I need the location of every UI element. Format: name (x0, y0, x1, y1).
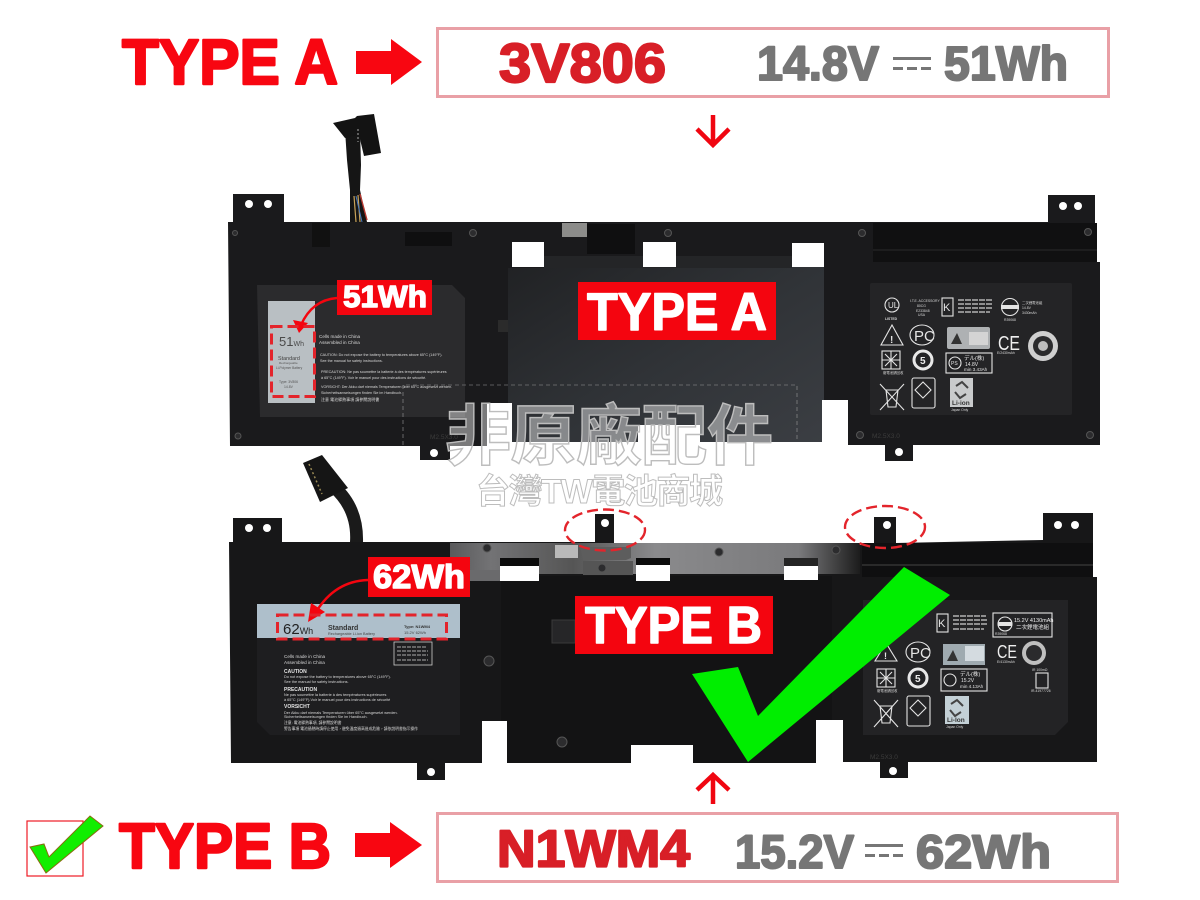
left label panel: 注意 電池驟熱事項 請參閱說明書 (321, 396, 379, 402)
dashed highlight: 51Wh label (272, 326, 314, 396)
left label panel: Sicherheitsanweisungen finden Sie im Handbuch. (321, 391, 402, 395)
left label panel: Assembled in China (284, 660, 325, 665)
windows (512, 242, 824, 267)
left label panel: See the manual for safety instructions. (284, 680, 349, 684)
left label panel: Rechargeable Li-ion Battery (328, 632, 375, 636)
spec box: TYPE B: N1WM4 (497, 820, 690, 878)
right regulatory panel: Japan Only (951, 408, 968, 412)
right regulatory panel (870, 283, 1072, 415)
battery photo: TYPE A: M2.5X3.0 (872, 433, 900, 440)
right regulatory panel: K (943, 302, 951, 314)
left label panel: 51Wh (279, 334, 304, 349)
mounting holes (245, 200, 1082, 457)
dashed highlight: 62Wh label (278, 615, 446, 639)
cable and connector (333, 114, 381, 222)
watermark (445, 399, 773, 511)
right regulatory panel: 二次鋰電池組 (1022, 300, 1043, 305)
dashed ellipse: center tab (565, 510, 645, 550)
spec box: TYPE A (438, 28, 1108, 96)
left label panel: Li-Polymer Battery (276, 366, 303, 370)
spec box: TYPE B: 62Wh (916, 825, 1051, 878)
right regulatory panel: UL (888, 301, 899, 310)
cable and connector (303, 455, 363, 542)
badge: TYPE B: TYPE B (585, 597, 762, 655)
right regulatory panel: 80CG (917, 304, 926, 308)
battery photo: TYPE B (229, 455, 1097, 780)
callout arrow: 51Wh (293, 298, 337, 333)
arrow: up to battery B (697, 775, 729, 804)
left label panel: PRECAUTION (284, 687, 317, 693)
left label panel: CAUTION (284, 669, 307, 675)
left label panel: Cells made in China (284, 654, 326, 659)
spec box: TYPE A: 3V806 (499, 32, 666, 94)
mounting holes (245, 519, 1079, 776)
right regulatory panel: ! (884, 651, 887, 661)
right regulatory panel: PC (910, 645, 931, 662)
left label panel: Type: N1WM4 (404, 624, 431, 629)
left label panel: à 65°C (149°F). Voir le manuel pour des instructions de sécurité. (321, 376, 426, 380)
left label panel: VORSICHT (284, 704, 310, 710)
callout arrow: 62Wh (308, 580, 368, 622)
arrow: TYPE A to spec box (356, 39, 422, 85)
screws (483, 544, 840, 747)
right regulatory panel: CE (997, 642, 1017, 662)
right regulatory panel: E/4130mAh (997, 660, 1015, 664)
right regulatory panel: 15.2V (961, 678, 975, 684)
badge: 51Wh: 51Wh (343, 279, 427, 314)
right regulatory panel: デル(株) (964, 354, 984, 362)
right regulatory panel: min 4.13Ah (960, 684, 984, 689)
left label panel: Do not expose the battery to temperatures above 65°C (149°F). (284, 675, 391, 679)
watermark: 非原廠配件 (445, 399, 773, 473)
left label panel: Der Akku darf niemals Temperaturen über 65°C ausgesetzt werden. (284, 711, 398, 715)
heading: TYPE A: TYPE A (122, 26, 338, 98)
icon: checked box (27, 816, 103, 876)
spec box: TYPE B (438, 814, 1118, 882)
left label panel: Assembled in China (319, 340, 360, 345)
right regulatory panel: 14.8V (1022, 306, 1032, 310)
right regulatory panel: 廢電池請回收 (883, 370, 904, 375)
right regulatory panel: min 3.43Ah (964, 367, 988, 372)
arrow: down to battery A (697, 115, 729, 145)
right regulatory panel (863, 600, 1068, 735)
icon: large green check mark (692, 567, 950, 762)
dashed ellipse: right tab (845, 506, 925, 548)
watermark: 台灣TW電池商城 (476, 473, 723, 511)
left label panel: VORSICHT: Der Akku darf niemals Temperaturen über 65°C ausgesetzt werden. (321, 385, 452, 389)
battery photo: TYPE A: M2.5X3.0 (430, 434, 458, 441)
battery photo: TYPE B: M2.5X3.0 (870, 754, 898, 761)
left label panel: Rechargeable (279, 361, 298, 365)
left label panel: See the manual for safety instructions. (320, 359, 383, 363)
left label panel: Standard (328, 625, 358, 632)
left label panel: à 65°C (149°F).Voir le manuel pour des instructions de sécurité (284, 698, 390, 702)
badge: 62Wh: 62Wh (373, 558, 465, 595)
right regulatory panel: Li-Ion (947, 717, 965, 724)
right regulatory panel: I.T.E. ACCESSORY (910, 299, 940, 303)
right regulatory panel: デル(株) (960, 670, 980, 678)
spec box: TYPE B: 15.2V (735, 825, 855, 878)
right regulatory panel: 5 (920, 356, 926, 367)
right regulatory panel: 15.2V 4130mAh (1014, 618, 1053, 624)
right regulatory panel: R39068 (1004, 318, 1016, 322)
right regulatory panel: IR 100mΩ (1032, 668, 1048, 672)
arrow: TYPE B to spec box (355, 822, 422, 868)
right regulatory panel: PS (951, 361, 958, 367)
right regulatory panel: 3430mAh (1022, 311, 1037, 315)
left label panel: Ne pas soumettre la batterie à des températures supérieures (284, 693, 386, 697)
right regulatory panel: 廢電池請回收 (877, 688, 898, 693)
badge: TYPE A: TYPE A (587, 283, 767, 342)
right regulatory panel: K (938, 618, 946, 630)
right regulatory panel: Li-ion (952, 400, 970, 407)
right regulatory panel: USA (918, 313, 926, 317)
left label panel: Type: 3V806 (279, 380, 298, 384)
right regulatory panel: R39068 (995, 632, 1007, 636)
right regulatory panel: E/2430mAh (997, 351, 1015, 355)
right regulatory panel: CE (998, 333, 1020, 355)
left label panel: 62Wh (283, 621, 313, 638)
spec box: TYPE A: 51Wh (944, 38, 1068, 91)
right regulatory panel: IR-41977726 (1031, 689, 1051, 693)
right regulatory panel: E233848 (916, 309, 930, 313)
heading: TYPE B: TYPE B (119, 810, 331, 882)
left label panel: PRECAUTION: Ne pas soumettre la batterie à des températures supérieures (321, 370, 447, 374)
right regulatory panel: 二次鋰電池組 (1016, 623, 1050, 631)
left label panel: Standard (278, 356, 300, 362)
left label panel (257, 285, 465, 417)
left label panel: 14.8V (284, 385, 294, 389)
left label panel: Cells made in China (319, 334, 361, 339)
screws (232, 228, 1094, 439)
left label panel: Sicherheitsanweisungen finden Sie im Handbuch. (284, 715, 368, 719)
right regulatory panel: LISTED (885, 317, 898, 321)
right regulatory panel: Japan Only (946, 725, 963, 729)
spec box: TYPE A: 14.8V (757, 38, 879, 91)
right regulatory panel: ! (890, 335, 893, 346)
left label panel: 15.2V 62Wh (404, 630, 426, 635)
right regulatory panel: 14.8V (965, 362, 979, 368)
left label panel (257, 604, 460, 735)
right regulatory panel: 5 (915, 674, 921, 685)
left label panel: CAUTION: Do not expose the battery to temperatures above 65°C (149°F). (320, 353, 442, 357)
battery photo: TYPE A (228, 114, 1100, 461)
windows and notches (482, 565, 843, 764)
right regulatory panel: PC (914, 328, 935, 345)
left label panel: 警告事項 電池過熱時請停止使用，避免溫度過高造成危險，請依說明書指示操作 (284, 726, 418, 731)
left label panel: 注意: 電池驟熱事項, 請參閱說明書 (284, 720, 342, 725)
